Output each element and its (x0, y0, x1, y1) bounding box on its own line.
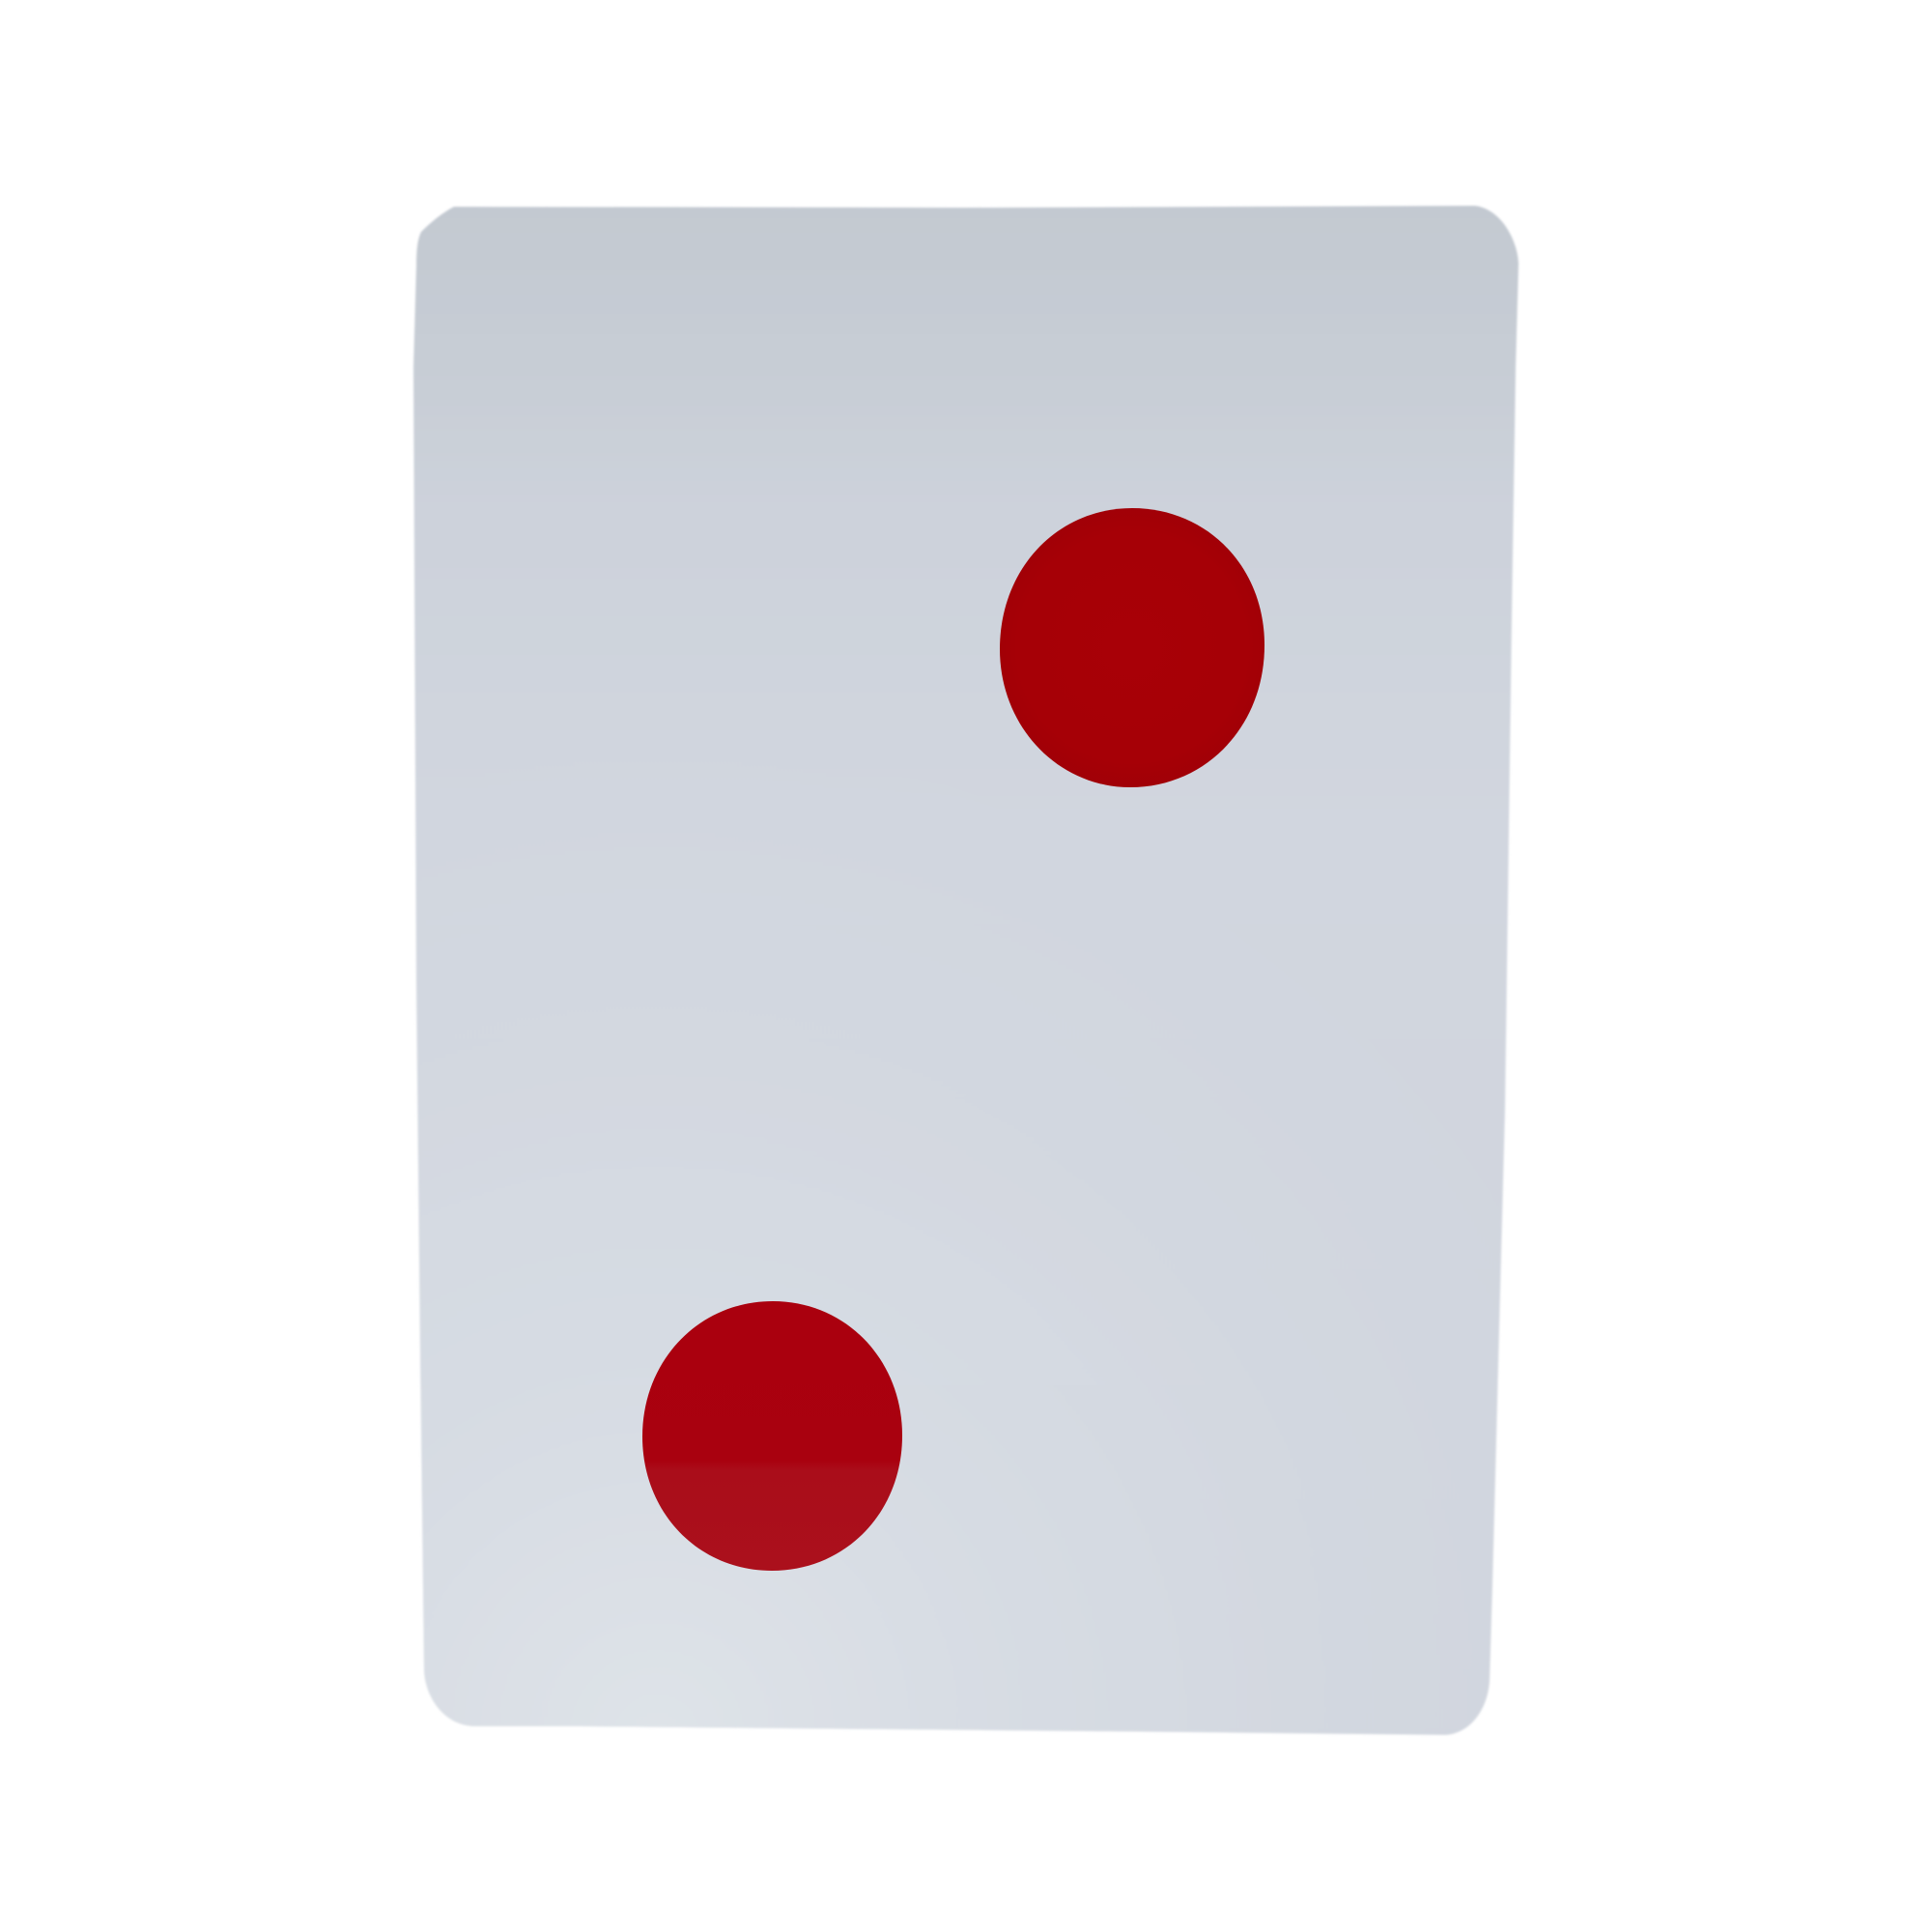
icon: upper right red dot (1000, 508, 1264, 787)
icon: lower left red dot (642, 1301, 902, 1571)
panel: grey rounded card (413, 206, 1519, 1735)
